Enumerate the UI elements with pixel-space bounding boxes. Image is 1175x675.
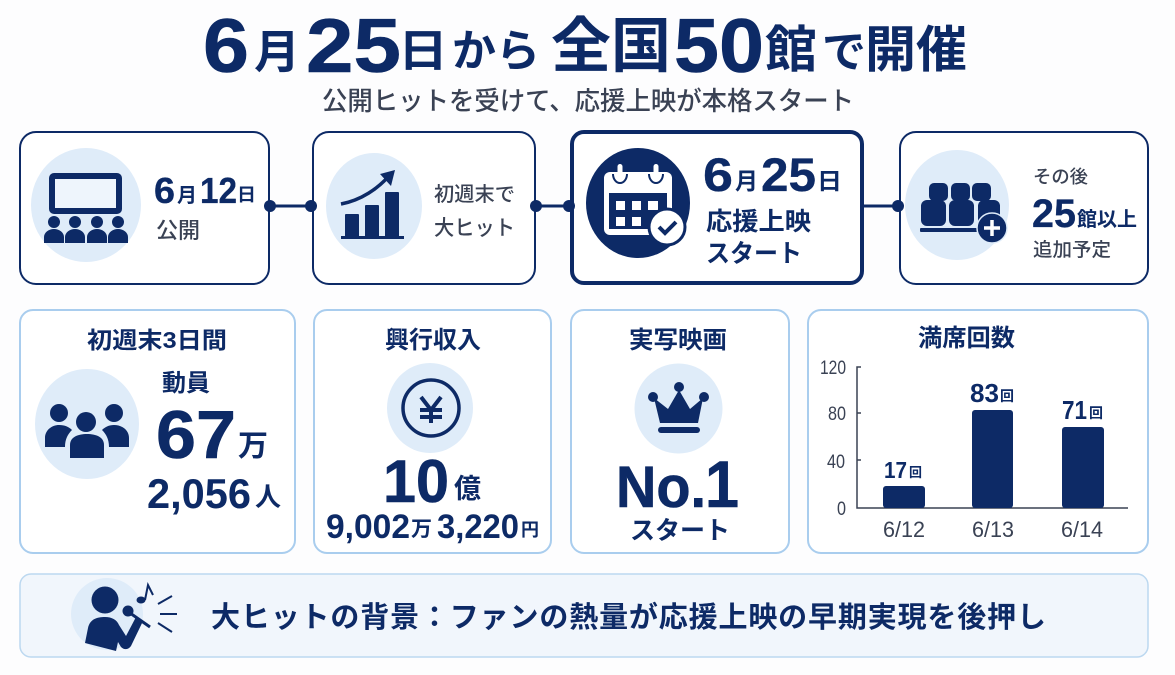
subtitle: 公開ヒットを受けて、応援上映が本格スタート — [322, 86, 854, 116]
number: 670,000 — [156, 397, 268, 473]
panel: No.1 — [571, 310, 789, 553]
bar chart: 40 — [827, 452, 845, 473]
number: 25 theaters or more: 館以上 — [1077, 208, 1137, 231]
icon: calendar with check — [586, 148, 690, 258]
bar chart: 80 — [828, 404, 846, 425]
bar chart: 6/13 — [972, 517, 1014, 542]
text: No.1: 1 — [705, 447, 739, 521]
number: 1 billion: 億 — [454, 474, 481, 504]
bar chart: 17 — [884, 457, 907, 483]
bar chart: 71 — [1062, 395, 1087, 425]
bar chart: 回 — [1089, 405, 1103, 421]
panel: sold-out screenings — [808, 310, 1148, 553]
icon: cinema screen and audience — [44, 176, 128, 243]
title: 開催 — [865, 22, 967, 78]
number: 1 billion — [383, 448, 481, 515]
number: 670,000: 万 — [238, 430, 268, 463]
title: 50 — [674, 4, 764, 89]
number: 1 billion: 10 — [383, 448, 449, 515]
text: start: スタート — [630, 517, 730, 545]
number: 90,023,220 yen: 3,220 — [437, 508, 519, 546]
label: cheering screenings start: 応援上映 — [706, 208, 811, 236]
date: June 25: 月 — [735, 168, 758, 194]
date: June 25: 日 — [817, 168, 842, 194]
bar chart: 6/14 — [1061, 517, 1103, 542]
panel: big hit — [313, 132, 535, 284]
panel: June 25 cheering screenings: スタート — [706, 240, 802, 268]
number: 90,023,220 yen — [326, 508, 539, 546]
panel: additional theaters — [900, 132, 1148, 284]
date: June 25 — [703, 148, 842, 201]
text: big hit on opening weekend: 初週末で — [434, 183, 515, 206]
label: release: 公開 — [156, 218, 200, 243]
title: で — [822, 28, 866, 77]
bar chart: 回 — [909, 465, 922, 480]
text: banner message: 大ヒットの背景：ファンの熱量が応援上映の早期実現を後押し — [211, 600, 1046, 634]
title: 6 — [203, 4, 249, 89]
number: 670,000: 67 — [156, 397, 236, 473]
text: No.1: No. — [616, 455, 706, 520]
heading: sold-out count: 満席回数 — [918, 325, 1015, 352]
icon: singer with microphone — [85, 585, 177, 651]
banner: background of the big hit — [20, 574, 1148, 657]
bar chart: 回 — [1000, 388, 1014, 404]
text: No.1 — [616, 447, 739, 521]
title: 全国 — [551, 13, 671, 80]
title: 月 — [254, 26, 300, 78]
panel: June 12 release — [20, 132, 269, 284]
heading: live action film: 実写映画 — [629, 327, 727, 354]
icon: growth chart — [341, 170, 404, 239]
heading: first weekend three days: 初週末3日間 — [87, 327, 227, 353]
number: 90,023,220 yen: 9,002 — [326, 508, 410, 546]
title — [203, 4, 967, 89]
icon: yen coin — [403, 380, 459, 436]
title: 館 — [765, 22, 817, 78]
panel: box office — [314, 310, 551, 553]
panel: June 25 cheering screenings — [572, 132, 862, 283]
title: から — [452, 27, 540, 76]
bar chart: 6/12 — [883, 517, 925, 542]
title: 25 — [306, 4, 401, 89]
panel: attendance — [20, 310, 295, 553]
number: 2,056 people: 2,056 — [147, 470, 251, 517]
date: June 12 — [154, 170, 256, 211]
date: June 12: 12 — [200, 170, 237, 211]
number: 2,056 people: 人 — [255, 482, 281, 512]
date: June 12: 日 — [237, 185, 256, 205]
date: June 25: 25 — [761, 148, 816, 201]
title: 日 — [398, 27, 448, 76]
label: attendance: 動員 — [162, 370, 210, 397]
number: 25 theaters or more: 25 — [1032, 192, 1076, 236]
icon: seats with plus — [920, 183, 1007, 243]
panel: big hit: 大ヒット — [434, 217, 515, 240]
text: then: その後 — [1033, 167, 1088, 187]
bar chart: 120 — [820, 358, 846, 379]
bar chart: 83 — [970, 378, 999, 408]
number: 90,023,220 yen: 円 — [521, 520, 539, 540]
timeline connectors — [264, 200, 904, 212]
date: June 25: 6 — [703, 148, 733, 201]
icon: crown — [648, 382, 709, 433]
date: June 12: 6 — [154, 170, 175, 211]
text: scheduled: 追加予定 — [1033, 239, 1111, 261]
heading: box office: 興行収入 — [385, 327, 481, 354]
date: June 12: 月 — [177, 185, 197, 207]
number: 25 theaters or more — [1032, 192, 1137, 236]
bar chart: 0 — [837, 499, 846, 520]
icon: people — [45, 404, 129, 458]
number: 90,023,220 yen: 万 — [411, 518, 432, 541]
bar chart — [820, 358, 1128, 542]
